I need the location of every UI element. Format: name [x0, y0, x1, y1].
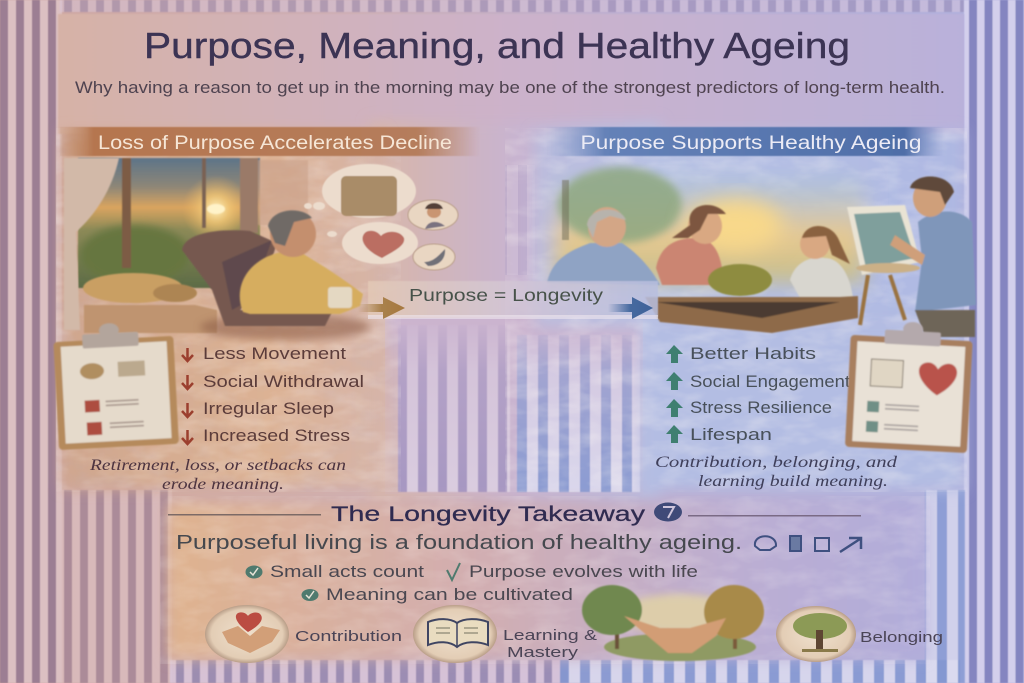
thought icon: leaf: [413, 244, 455, 270]
check: small acts count: Small acts count: [270, 563, 425, 581]
item: increased stress: Increased Stress: [203, 426, 350, 445]
item: stress resilience: Stress Resilience: [690, 398, 832, 417]
caption: decline: [89, 457, 346, 493]
mother: [656, 205, 726, 285]
grandfather: [547, 207, 660, 285]
icon: belonging tree: [776, 606, 856, 662]
icon: takeaway emblem: [654, 502, 682, 522]
list: decline effects: [182, 344, 364, 445]
easel with painting: [847, 205, 920, 325]
heading: left panel: [60, 127, 480, 156]
heading: takeaway: The Longevity Takeaway: [331, 503, 646, 526]
title: Purpose, Meaning, and Healthy Ageing: [144, 25, 850, 66]
arrow: banner to supports: [608, 297, 653, 319]
icon: learning book: [413, 605, 497, 663]
check: meaning cultivated: Meaning can be cultivated: [326, 586, 573, 604]
arrow: decline to banner: [358, 297, 405, 319]
label: learning and mastery: Learning &: [503, 627, 597, 644]
man: [240, 210, 363, 314]
label: learning and mastery: Mastery: [507, 644, 579, 661]
heading: right panel: Purpose Supports Healthy Ageing: [580, 133, 922, 154]
item: irregular sleep: Irregular Sleep: [203, 399, 334, 418]
illustration: handshake between trees: [582, 585, 764, 661]
thought bubble: heart: [327, 222, 418, 264]
armchair: [182, 230, 333, 326]
check: small acts count: [246, 563, 425, 581]
check: purpose evolves: Purpose evolves with life: [469, 563, 698, 581]
panel: centre striped section: [370, 122, 660, 502]
caption: decline: erode meaning.: [162, 476, 284, 493]
panel: title band: [58, 14, 964, 134]
sleeping dog and cushion: [83, 273, 217, 333]
sky and trees: [555, 167, 865, 283]
item: lifespan: Lifespan: [690, 425, 772, 444]
panel: longevity takeaway: [160, 496, 943, 664]
divider right: [688, 515, 861, 516]
panel: right supports wash: [505, 128, 967, 492]
caption: decline: Retirement, loss, or setbacks can: [89, 457, 346, 474]
illustration: family gardening and man painting: [547, 167, 976, 337]
icon: left clipboard: [53, 320, 179, 450]
caption: supports: learning build meaning.: [698, 473, 888, 490]
label: belonging: Belonging: [860, 629, 943, 646]
subtitle: Why having a reason to get up in the morning may be one of the strongest predictors of long-term health.: [75, 78, 945, 97]
statement icons: [755, 536, 861, 552]
panel: left decline wash: [56, 128, 401, 492]
icon: contribution: [205, 605, 289, 663]
caption: supports: Contribution, belonging, and: [655, 454, 897, 471]
item: social engagement: Social Engagement: [690, 372, 850, 391]
divider left: [168, 514, 321, 516]
item: less movement: Less Movement: [203, 344, 346, 363]
caption: supports: [655, 454, 897, 490]
heading: right panel: [545, 127, 945, 156]
item: lifespan: [666, 425, 772, 444]
icon: right clipboard: [845, 319, 973, 453]
shadow under chair: [200, 314, 370, 340]
thought bubble: recliner: [304, 164, 416, 218]
list: supportive effects: [666, 344, 850, 444]
heading: left panel: Loss of Purpose Accelerates Decline: [98, 133, 452, 154]
window view: [78, 158, 308, 288]
label: learning and mastery: [503, 627, 597, 661]
item: better habits: [666, 344, 816, 363]
girl: [790, 226, 853, 298]
painter: [890, 176, 976, 337]
centre banner: Purpose = Longevity: Purpose = Longevity: [409, 285, 603, 305]
young plant: [708, 264, 772, 296]
thought icon: grandchild: [408, 200, 458, 230]
centre banner: Purpose = Longevity: [368, 281, 658, 319]
item: better habits: Better Habits: [690, 344, 816, 363]
statement: Purposeful living is a foundation of healthy ageing.: [176, 532, 742, 554]
item: social withdrawal: Social Withdrawal: [203, 372, 364, 391]
wooden planter: [645, 296, 858, 333]
illustration: man in armchair by the window: [64, 158, 458, 340]
label: contribution: Contribution: [295, 628, 402, 645]
curtain: [64, 158, 119, 330]
